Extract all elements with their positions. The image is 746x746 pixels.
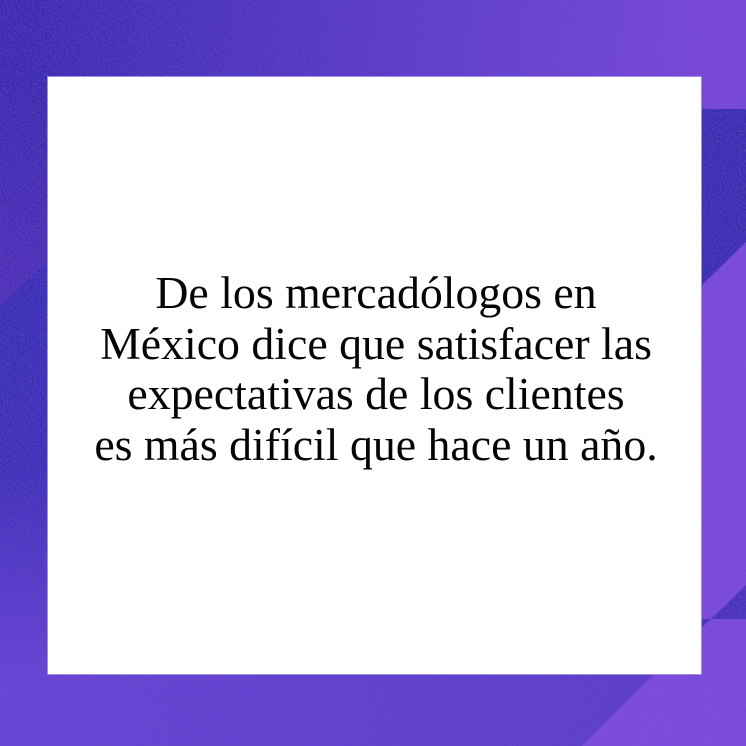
shape: right dark triangle xyxy=(711,585,746,619)
statement text: México dice que satisfacer las xyxy=(100,318,652,369)
statement text: expectativas de los clientes xyxy=(127,368,625,419)
shape: left blue wedge xyxy=(0,262,60,680)
statement text xyxy=(94,267,658,470)
shape: right lower light area xyxy=(690,242,746,680)
shape: bottom band xyxy=(0,674,654,746)
shape: bottom right light corner xyxy=(582,674,746,746)
shape: right dark band xyxy=(690,109,746,297)
statement text: De los mercadólogos en xyxy=(155,267,597,318)
statement text: es más difícil que hace un año. xyxy=(94,419,658,470)
shape: small dark triangle xyxy=(701,619,711,628)
shape: left upper strip xyxy=(0,70,60,306)
shape: right upper light area xyxy=(690,0,746,109)
panel: white card xyxy=(47,76,702,675)
